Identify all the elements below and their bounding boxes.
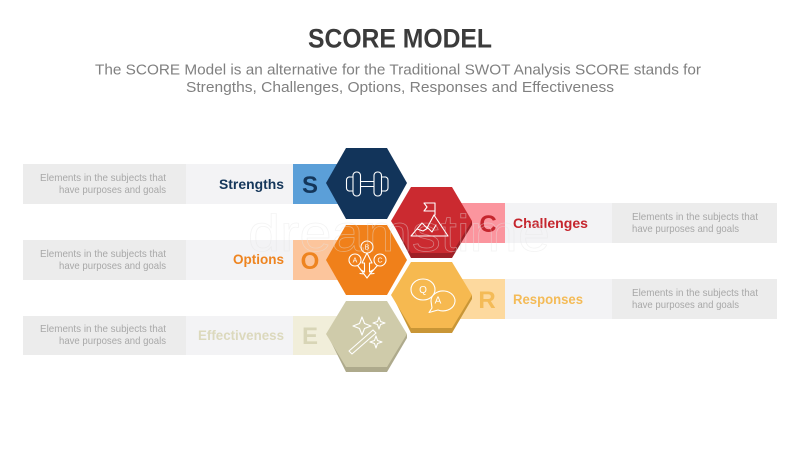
options description: have purposes and goals (59, 260, 166, 272)
challenges description (632, 211, 758, 235)
challenges description: have purposes and goals (632, 223, 739, 235)
hexagon: responses (391, 262, 472, 333)
options label: Options (233, 252, 284, 267)
effectiveness description: have purposes and goals (59, 335, 166, 347)
letter S: S (302, 172, 318, 199)
responses description (632, 287, 758, 311)
watermark: dreamstime (248, 205, 550, 263)
icon: magic wand with sparkles (349, 317, 385, 354)
strengths label: Strengths (219, 177, 284, 192)
panel: challenges row (460, 203, 777, 243)
options description (40, 248, 166, 272)
subtitle: The SCORE Model is an alternative for the Traditional SWOT Analysis SCORE stands for (95, 62, 701, 78)
title: SCORE MODEL (308, 24, 492, 54)
subtitle: Strengths, Challenges, Options, Responses and Effectiveness (186, 79, 614, 96)
effectiveness description (40, 323, 166, 347)
effectiveness label: Effectiveness (198, 328, 284, 343)
subtitle (95, 62, 701, 96)
panel: options row (23, 240, 343, 280)
challenges label: Challenges (513, 216, 588, 231)
options description: Elements in the subjects that (40, 248, 166, 260)
icon: three options with arrows: C (377, 258, 383, 264)
panel: strengths row (23, 164, 343, 204)
icon: three options with arrows (349, 241, 386, 278)
challenges description: Elements in the subjects that (632, 211, 758, 223)
letter O: O (301, 248, 319, 275)
responses description: have purposes and goals (632, 299, 739, 311)
hexagon: strengths (326, 148, 407, 219)
strengths description: Elements in the subjects that (40, 172, 166, 184)
icon: question and answer bubbles (411, 279, 455, 312)
icon: three options with arrows: A (353, 258, 358, 264)
icon: question and answer bubbles: A (435, 296, 442, 306)
letter R: R (478, 287, 496, 314)
icon: mountain with flag (411, 203, 448, 236)
panel: effectiveness row (23, 316, 343, 355)
letter E: E (302, 323, 318, 350)
panel: responses row (460, 279, 777, 319)
hexagon: options (326, 225, 407, 295)
icon: dumbbell (346, 172, 388, 196)
letter C: C (479, 211, 497, 238)
strengths description: have purposes and goals (59, 184, 166, 196)
responses label: Responses (513, 292, 583, 307)
hexagon: challenges (391, 187, 472, 258)
icon: three options with arrows: B (365, 244, 370, 252)
strengths description (40, 172, 166, 196)
hexagon: effectiveness (326, 301, 407, 372)
icon: question and answer bubbles: Q (419, 285, 427, 296)
effectiveness description: Elements in the subjects that (40, 323, 166, 335)
responses description: Elements in the subjects that (632, 287, 758, 299)
